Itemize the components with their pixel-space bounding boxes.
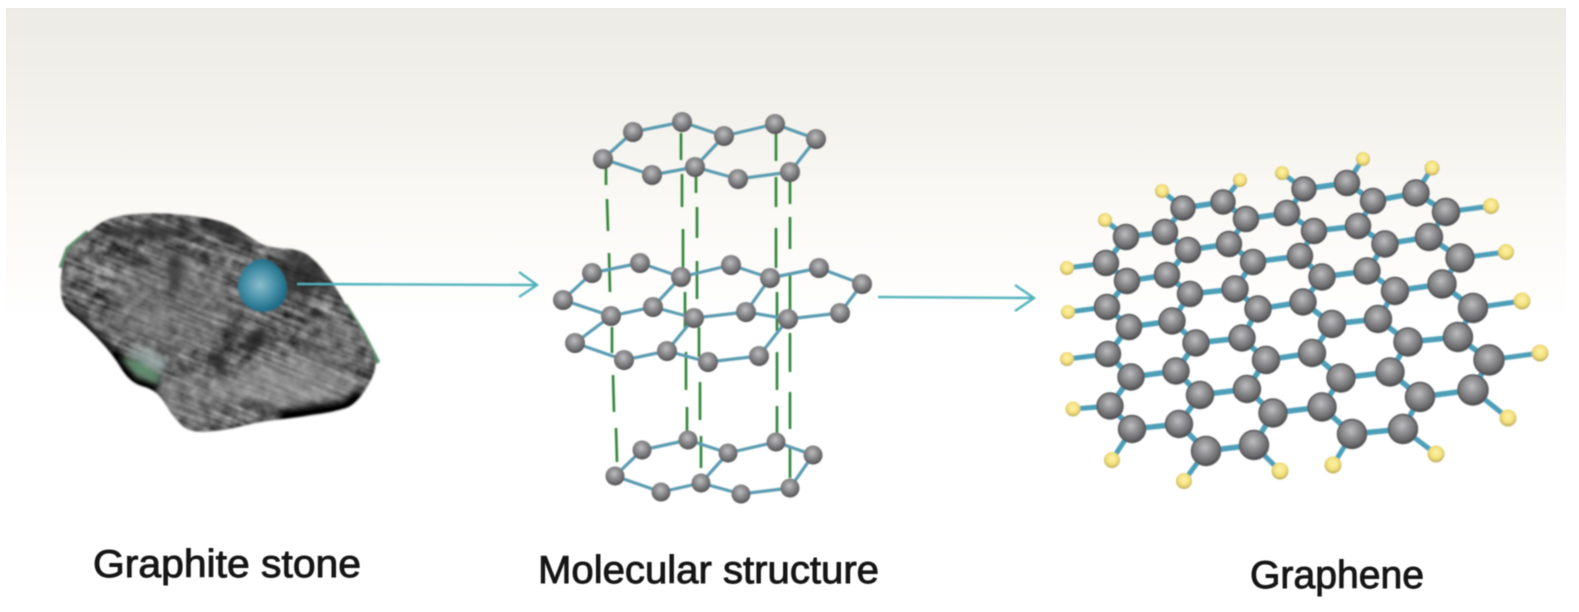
blue selection dome bbox=[238, 259, 287, 312]
background panel bbox=[6, 8, 1566, 320]
molecular structure bbox=[553, 112, 872, 504]
top layer atoms bbox=[593, 112, 826, 189]
middle layer atoms bbox=[553, 253, 872, 372]
hydrogen atoms bbox=[1060, 152, 1548, 489]
carbon bonds bbox=[1106, 183, 1489, 451]
graphene sheet bbox=[1060, 152, 1548, 489]
label: molecular structure: Molecular structure bbox=[538, 549, 879, 592]
carbon atoms bbox=[1094, 170, 1504, 466]
arrow: molecular structure to graphene bbox=[878, 285, 1034, 311]
rock body bbox=[59, 212, 377, 434]
label: graphene: Graphene bbox=[1250, 554, 1424, 597]
green rock edges bbox=[61, 232, 378, 385]
bottom layer atoms bbox=[606, 430, 822, 504]
hydrogen bonds bbox=[1067, 159, 1540, 481]
interlayer dashed bonds bbox=[606, 133, 790, 478]
arrow: stone to molecular structure bbox=[297, 272, 537, 297]
layer bonds bbox=[563, 122, 862, 494]
graphite stone bbox=[58, 212, 382, 434]
label: graphite stone: Graphite stone bbox=[93, 543, 361, 586]
